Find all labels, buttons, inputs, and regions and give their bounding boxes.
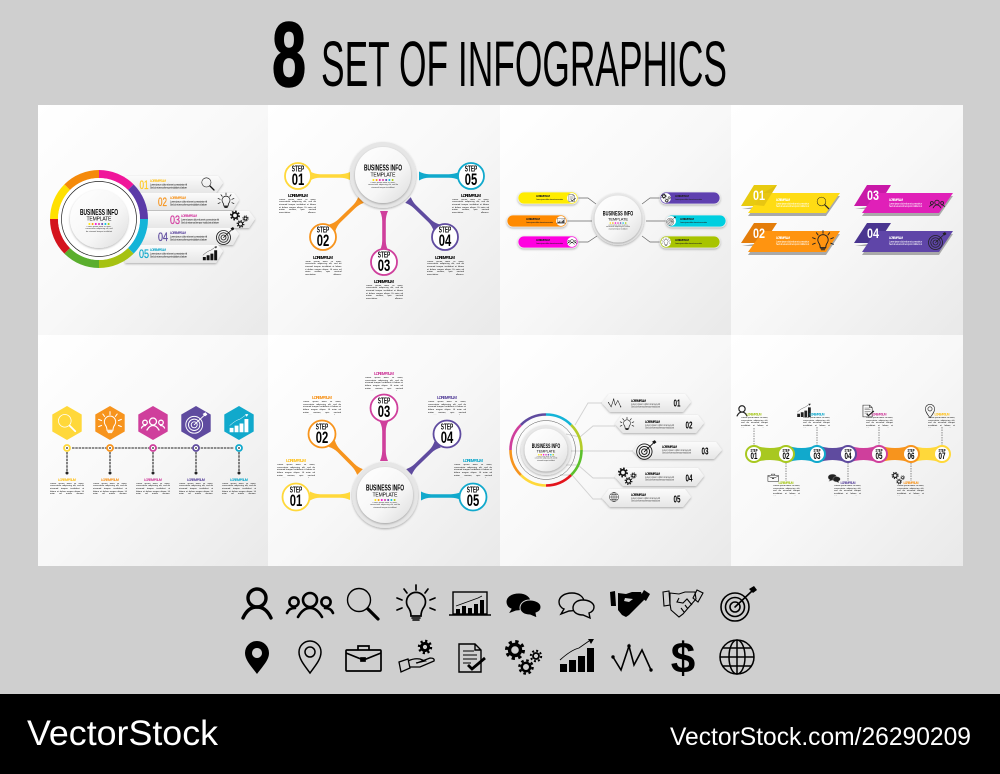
connector lines: [567, 198, 666, 242]
timeline captions: Lorem ipsum dolor sit amet, consectetur adipiscing elit, sed do eiusmod tempor incididunt ut labore et dolore magna aliqua. Ut enim ad minim veniam.: [222, 482, 256, 495]
step 05: [871, 446, 887, 462]
dashed timeline: [67, 448, 239, 473]
step 02: STEP: [782, 448, 790, 453]
step 01: 01: [290, 491, 302, 510]
connector lines: [560, 403, 633, 499]
panel: parallelogram banners: [731, 105, 963, 335]
step 05: [460, 484, 486, 510]
step 05: [458, 163, 484, 189]
banner 04: [854, 223, 953, 252]
hub disc: [352, 462, 418, 528]
panel: ring with connected arrows: [500, 335, 731, 566]
row 05: LOREM IPSUM: [631, 493, 646, 497]
chain captions: LOREM IPSUM: [872, 412, 887, 416]
hub disc: [592, 193, 644, 245]
pill text: LOREM IPSUM: [675, 194, 690, 198]
panel: circular ring with five arrows: [38, 105, 269, 335]
row 05: LOREM IPSUM: [150, 248, 166, 252]
icon: dollar: $: [671, 634, 695, 683]
central disc: [516, 420, 576, 480]
banner 01: Lorem ipsum dolor sit amet consectetur: [776, 202, 809, 206]
row 01: Lorem ipsum dolor sit amet consectetur elit: [150, 184, 187, 186]
chain captions: LOREM IPSUM: [840, 481, 856, 485]
row 03: Sed do eiusmod tempor incididunt ut labore: [181, 222, 220, 224]
row 05: [609, 492, 681, 506]
ring segments: [54, 174, 144, 264]
banner shadows: [742, 196, 953, 255]
step 05: 05: [465, 170, 477, 189]
step 02: [310, 224, 336, 250]
step 01: 01: [750, 451, 758, 462]
step 07: 07: [938, 451, 946, 462]
step 04: STEP: [844, 448, 852, 453]
row 02: LOREM IPSUM: [645, 420, 660, 424]
row 01: Lorem ipsum dolor sit amet elit: [631, 403, 660, 406]
centre text: TEMPLATE: [86, 217, 112, 223]
banner 01: 01: [753, 187, 765, 203]
icon: magnifier: [348, 588, 378, 619]
pill text: LOREM IPSUM: [680, 217, 694, 221]
pill text: Lorem ipsum dolor sit amet consectetur: [675, 242, 702, 245]
step 07: [934, 446, 950, 462]
banner 01: LOREM IPSUM: [776, 198, 790, 202]
pill text: Lorem ipsum dolor sit amet consectetur: [536, 198, 563, 201]
row 01: LOREM IPSUM: [150, 179, 166, 183]
title: [272, 4, 727, 106]
row 05: Lorem ipsum dolor sit amet elit: [631, 497, 660, 500]
icon: hand with gear: [399, 641, 434, 672]
step captions: LOREM IPSUM: [463, 458, 483, 463]
step 05: STEP: [465, 165, 478, 174]
banner 02: 02: [753, 225, 765, 241]
icon: briefcase: [346, 646, 381, 671]
step 01: [285, 163, 311, 189]
panel: seven step chain: [731, 335, 963, 566]
row 02: 02: [686, 420, 693, 432]
row 03: [170, 211, 248, 227]
row 01: [608, 398, 681, 410]
hub text: BUSINESS INFO: [603, 211, 633, 218]
row 03: 03: [702, 446, 709, 458]
step 03: STEP: [378, 397, 391, 406]
banner 04: LOREM IPSUM: [889, 236, 903, 240]
pill text: LOREM IPSUM: [526, 217, 540, 221]
chain captions: LOREM IPSUM: [904, 481, 919, 485]
chain captions: LOREM IPSUM: [810, 412, 825, 416]
row 05: Sed do eiusmod tempor incididunt ut labore: [150, 256, 188, 258]
central disc: [58, 178, 140, 260]
panel: hub with five steps below: [268, 105, 500, 335]
step 06: [903, 446, 919, 462]
row 02: LOREM IPSUM: [170, 196, 186, 200]
step captions: LOREM IPSUM: [374, 279, 394, 284]
timeline captions: LOREM IPSUM: [101, 478, 119, 482]
centre text: [532, 443, 560, 462]
row 01: 01: [140, 178, 149, 192]
row 02: Sed do eiusmod tempor incididunt ut labore: [170, 204, 208, 206]
step 01: [282, 484, 310, 510]
pill text: LOREM IPSUM: [675, 238, 690, 242]
centre text: Lorem ipsum dolor sit amet, consectetur adipiscing elit, sed do eiusmod tempor incididunt: [85, 226, 113, 233]
step 05: STEP: [467, 486, 480, 495]
connectors: [310, 421, 461, 500]
step 01: STEP: [290, 486, 303, 495]
step captions: LOREM IPSUM: [312, 395, 332, 400]
step 02: 02: [316, 428, 328, 447]
step 03: STEP: [814, 448, 820, 453]
step captions: LOREM IPSUM: [435, 255, 455, 260]
hub text: [364, 163, 402, 190]
hub text: [603, 211, 633, 231]
timeline captions: Lorem ipsum dolor sit amet, consectetur adipiscing elit, sed do eiusmod tempor incididunt ut labore et dolore magna aliqua. Ut enim ad minim veniam.: [179, 482, 213, 495]
step captions: LOREM IPSUM: [461, 193, 481, 198]
row 02: [158, 193, 234, 209]
row 04: 04: [158, 230, 168, 244]
row 04: Sed do eiusmod tempor incididunt ut labore: [170, 238, 208, 242]
row 03: Lorem ipsum dolor sit amet consectetur elit: [181, 218, 219, 222]
step 02: [308, 420, 336, 448]
step 05: STEP: [876, 448, 882, 453]
hub disc: [350, 142, 416, 208]
row 01: Sed do eiusmod tempor incididunt: [631, 406, 660, 408]
row 03: LOREM IPSUM: [662, 445, 677, 449]
hub text: Lorem ipsum dolor sit amet, consectetur adipiscing elit, sed do eiusmod tempor incididunt: [606, 225, 630, 230]
icon: globe: [720, 640, 754, 674]
row 04: 04: [686, 474, 693, 484]
hub text: TEMPLATE: [372, 493, 398, 499]
banner 03: Sed do eiusmod tempor incididunt ut: [889, 205, 922, 208]
step 04: STEP: [441, 423, 454, 432]
pill icons: [556, 193, 676, 247]
step 01: STEP: [292, 165, 305, 174]
hub text: [366, 483, 404, 510]
hub text: Lorem ipsum dolor sit amet, consectetur adipiscing elit, sed do eiusmod tempor incididunt: [370, 502, 400, 509]
step 04: STEP: [439, 226, 452, 235]
icon: team: [287, 593, 333, 617]
step captions: LOREM IPSUM: [288, 193, 308, 198]
centre text: TEMPLATE: [537, 449, 556, 453]
row 02: Lorem ipsum dolor sit amet elit: [645, 424, 674, 427]
banner 03: LOREM IPSUM: [889, 198, 903, 202]
step 06: STEP: [908, 448, 914, 453]
row 01: 01: [674, 398, 681, 410]
hub text: BUSINESS INFO: [366, 483, 404, 493]
icon: outline speech bubbles: [559, 593, 594, 618]
step 07: STEP: [938, 448, 946, 453]
step captions: [277, 371, 492, 478]
timeline captions: [50, 478, 256, 496]
icon: filled speech bubbles: [506, 593, 541, 618]
chain icons: [737, 404, 935, 484]
banner 01: [741, 185, 840, 213]
pill text: LOREM IPSUM: [536, 238, 550, 242]
step 04: [434, 420, 460, 448]
chain captions: LOREM IPSUM: [746, 412, 762, 416]
hexagon icons: [58, 412, 248, 433]
chain links: [754, 445, 942, 463]
arrow banners: [125, 176, 255, 263]
banner 04: 04: [867, 225, 879, 241]
title: 8: [272, 4, 306, 106]
step 03: 03: [378, 402, 390, 421]
timeline captions: Lorem ipsum dolor sit amet, consectetur adipiscing elit, sed do eiusmod tempor incididunt ut labore et dolore magna aliqua. Ut enim ad minim veniam.: [136, 482, 170, 495]
row 03: 03: [170, 213, 180, 227]
step 04: [432, 224, 458, 250]
step 05: 05: [876, 451, 883, 462]
banner 01: Sed do eiusmod tempor incididunt ut: [776, 205, 809, 208]
step captions: LOREM IPSUM: [437, 395, 457, 400]
banner 04: Sed do eiusmod tempor incididunt ut: [889, 243, 922, 246]
timeline captions: LOREM IPSUM: [187, 478, 205, 482]
timeline captions: LOREM IPSUM: [58, 478, 76, 482]
row 04: Sed do eiusmod tempor incididunt: [645, 478, 674, 482]
step captions: LOREM IPSUM: [374, 371, 394, 376]
row 04: [619, 468, 693, 484]
banner 02: LOREM IPSUM: [776, 236, 790, 240]
row 02: Sed do eiusmod tempor incididunt: [645, 426, 674, 430]
row 03: Lorem ipsum dolor sit amet elit: [662, 449, 691, 452]
chain captions: LOREM IPSUM: [778, 481, 794, 485]
step 06: 06: [908, 451, 914, 462]
row 01: LOREM IPSUM: [631, 399, 646, 403]
step 03: [370, 394, 398, 422]
row 04: [158, 227, 234, 244]
banner 02: Lorem ipsum dolor sit amet consectetur: [776, 240, 809, 244]
chain captions: [741, 412, 955, 496]
arrows: [602, 394, 722, 507]
row 03: Sed do eiusmod tempor incididunt: [662, 452, 691, 454]
banner 02: [741, 223, 840, 252]
banner 03: [854, 185, 953, 213]
hub text: TEMPLATE: [370, 173, 396, 179]
step 01: STEP: [750, 448, 758, 453]
step 01: [746, 446, 762, 462]
row 04: Lorem ipsum dolor sit amet elit: [645, 476, 674, 479]
footer bar: VectorStock.com/26290209: [670, 723, 971, 751]
centre text: BUSINESS INFO: [532, 443, 560, 450]
timeline captions: LOREM IPSUM: [230, 478, 248, 482]
row 04: Lorem ipsum dolor sit amet consectetur elit: [170, 236, 207, 238]
step 02: STEP: [316, 423, 329, 432]
step 01: 01: [292, 170, 304, 189]
step 04: 04: [844, 451, 852, 462]
icon: growth chart: [560, 639, 594, 672]
icon: user: [243, 589, 271, 618]
centre text: Lorem ipsum dolor sit amet, consectetur adipiscing elit, sed do eiusmod tempor incididunt: [535, 456, 557, 461]
row 02: Lorem ipsum dolor sit amet consectetur elit: [170, 200, 207, 204]
hub text: BUSINESS INFO: [364, 163, 402, 173]
icon: gears: [506, 642, 541, 674]
icon: zigzag line: [611, 644, 653, 672]
row 05: Lorem ipsum dolor sit amet consectetur elit: [150, 252, 187, 256]
dashed leaders: [754, 427, 942, 481]
icon: outline handshake: [663, 590, 703, 617]
icon: filled location pin: [245, 641, 269, 674]
step 02: 02: [317, 231, 329, 250]
row 05: 05: [674, 494, 681, 506]
pill text: LOREM IPSUM: [536, 194, 550, 198]
panel: hub with five steps above: [268, 335, 500, 566]
step 04: [840, 446, 856, 462]
outer ring: [510, 414, 582, 486]
timeline nodes: [64, 445, 242, 451]
icon: filled handshake: [610, 590, 650, 617]
banner 03: Lorem ipsum dolor sit amet consectetur: [889, 202, 922, 206]
step 05: 05: [467, 491, 479, 510]
timeline captions: LOREM IPSUM: [144, 478, 162, 482]
row 01: Sed do eiusmod tempor incididunt ut labore: [150, 186, 188, 190]
centre text: BUSINESS INFO: [80, 207, 118, 217]
panel: hub with six pills: [500, 105, 731, 335]
icon: outline location pin: [299, 641, 321, 673]
step captions: [279, 193, 489, 298]
icon: document check: [459, 644, 485, 672]
row 02: 02: [158, 195, 167, 209]
icon: target: [721, 586, 757, 621]
pill text: Lorem ipsum dolor sit amet consectetur: [675, 198, 702, 201]
pill text: Lorem ipsum dolor sit amet consectetur: [536, 242, 563, 245]
step 03: 03: [814, 451, 820, 462]
centre text: [80, 207, 118, 234]
row 03: LOREM IPSUM: [181, 214, 197, 218]
pill text: Lorem ipsum dolor sit amet consectetur: [680, 221, 707, 224]
chain captions: LOREM IPSUM: [934, 412, 950, 416]
hub text: Lorem ipsum dolor sit amet, consectetur adipiscing elit, sed do eiusmod tempor incididunt: [368, 182, 398, 189]
step 02: 02: [782, 451, 790, 462]
panel: hexagon timeline: [38, 335, 269, 566]
row 02: [620, 417, 693, 432]
step 04: 04: [439, 231, 452, 250]
pill text: Lorem ipsum dolor sit amet consectetur: [526, 221, 553, 224]
step 02: [778, 446, 794, 462]
pill text: [526, 194, 707, 245]
icon: light bulb: [397, 585, 435, 620]
banner 03: 03: [867, 187, 879, 203]
step 04: 04: [441, 428, 454, 447]
row 01: [140, 178, 214, 192]
row 05: 05: [139, 247, 149, 261]
row 05: [139, 246, 217, 261]
banner 04: Lorem ipsum dolor sit amet consectetur: [889, 240, 922, 244]
step 03: STEP: [378, 251, 391, 260]
footer bar: VectorStock: [27, 714, 219, 753]
step 02: STEP: [317, 226, 330, 235]
step captions: LOREM IPSUM: [286, 458, 306, 463]
footer bar: [0, 694, 1000, 774]
connectors: [310, 172, 459, 251]
row 03: [637, 440, 709, 459]
pills: [507, 192, 726, 248]
icon: laptop chart: [449, 592, 491, 615]
banner 02: Sed do eiusmod tempor incididunt ut: [776, 243, 809, 246]
row 04: LOREM IPSUM: [170, 231, 186, 235]
hexagons: [52, 406, 254, 440]
row 05: Sed do eiusmod tempor incididunt: [631, 500, 660, 502]
row 04: LOREM IPSUM: [645, 472, 660, 476]
step 03: 03: [378, 256, 390, 275]
step captions: LOREM IPSUM: [313, 255, 333, 260]
step 03: [371, 249, 397, 275]
timeline captions: Lorem ipsum dolor sit amet, consectetur adipiscing elit, sed do eiusmod tempor incididunt ut labore et dolore magna aliqua. Ut enim ad minim veniam.: [93, 482, 127, 495]
hub text: TEMPLATE: [608, 216, 628, 221]
step 03: [809, 446, 825, 462]
timeline captions: Lorem ipsum dolor sit amet, consectetur adipiscing elit, sed do eiusmod tempor incididunt ut labore et dolore magna aliqua. Ut enim ad minim veniam.: [50, 482, 84, 495]
